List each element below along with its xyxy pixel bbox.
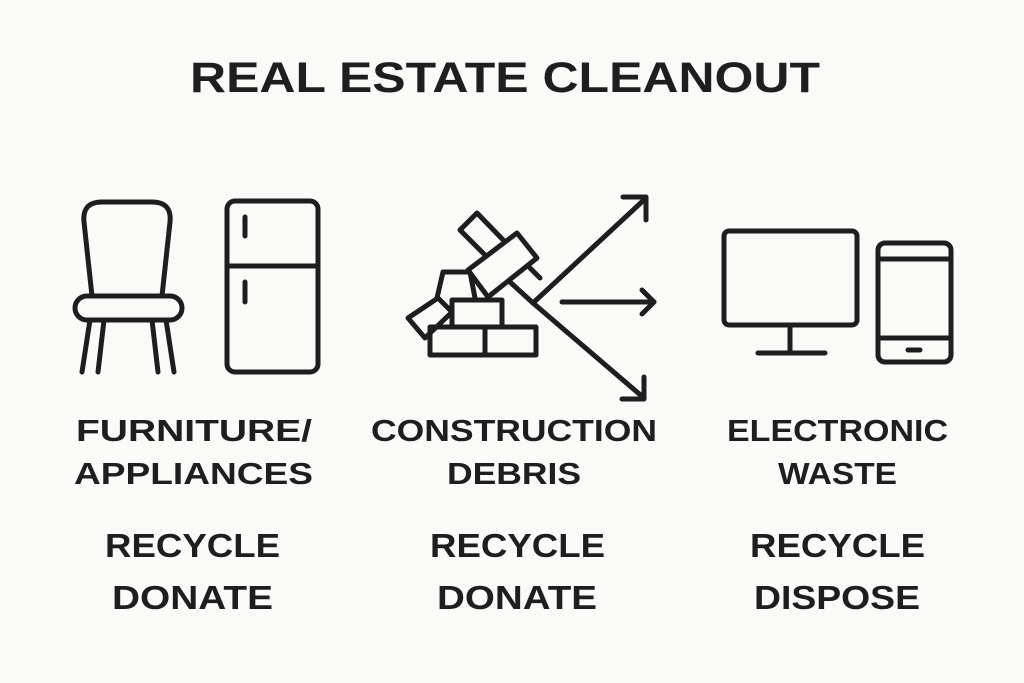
actions: col 3: DISPOSE bbox=[754, 579, 920, 616]
label: construction debris: DEBRIS bbox=[447, 456, 581, 491]
label: furniture/appliances: FURNITURE/ bbox=[76, 413, 312, 448]
actions: col 2 bbox=[430, 527, 605, 616]
actions: col 1: RECYCLE bbox=[105, 527, 280, 564]
actions: col 3 bbox=[750, 527, 925, 616]
icon: construction debris with arrows bbox=[408, 197, 654, 399]
label: electronic waste: ELECTRONIC bbox=[727, 413, 948, 448]
label: furniture/appliances bbox=[74, 413, 313, 491]
actions: col 3: RECYCLE bbox=[750, 527, 925, 564]
actions: col 2: RECYCLE bbox=[430, 527, 605, 564]
icon: phone bbox=[878, 243, 951, 362]
label: construction debris bbox=[371, 413, 657, 491]
icon: fridge bbox=[227, 201, 318, 372]
label: electronic waste bbox=[727, 413, 948, 491]
actions: col 2: DONATE bbox=[437, 579, 597, 616]
icon: monitor bbox=[724, 231, 857, 353]
actions: col 1 bbox=[105, 527, 280, 616]
icon: chair bbox=[75, 202, 182, 372]
label: construction debris: CONSTRUCTION bbox=[371, 413, 657, 448]
actions: col 1: DONATE bbox=[112, 579, 273, 616]
label: electronic waste: WASTE bbox=[778, 456, 897, 491]
label: furniture/appliances: APPLIANCES bbox=[74, 456, 313, 491]
title: REAL ESTATE CLEANOUT bbox=[190, 54, 820, 102]
